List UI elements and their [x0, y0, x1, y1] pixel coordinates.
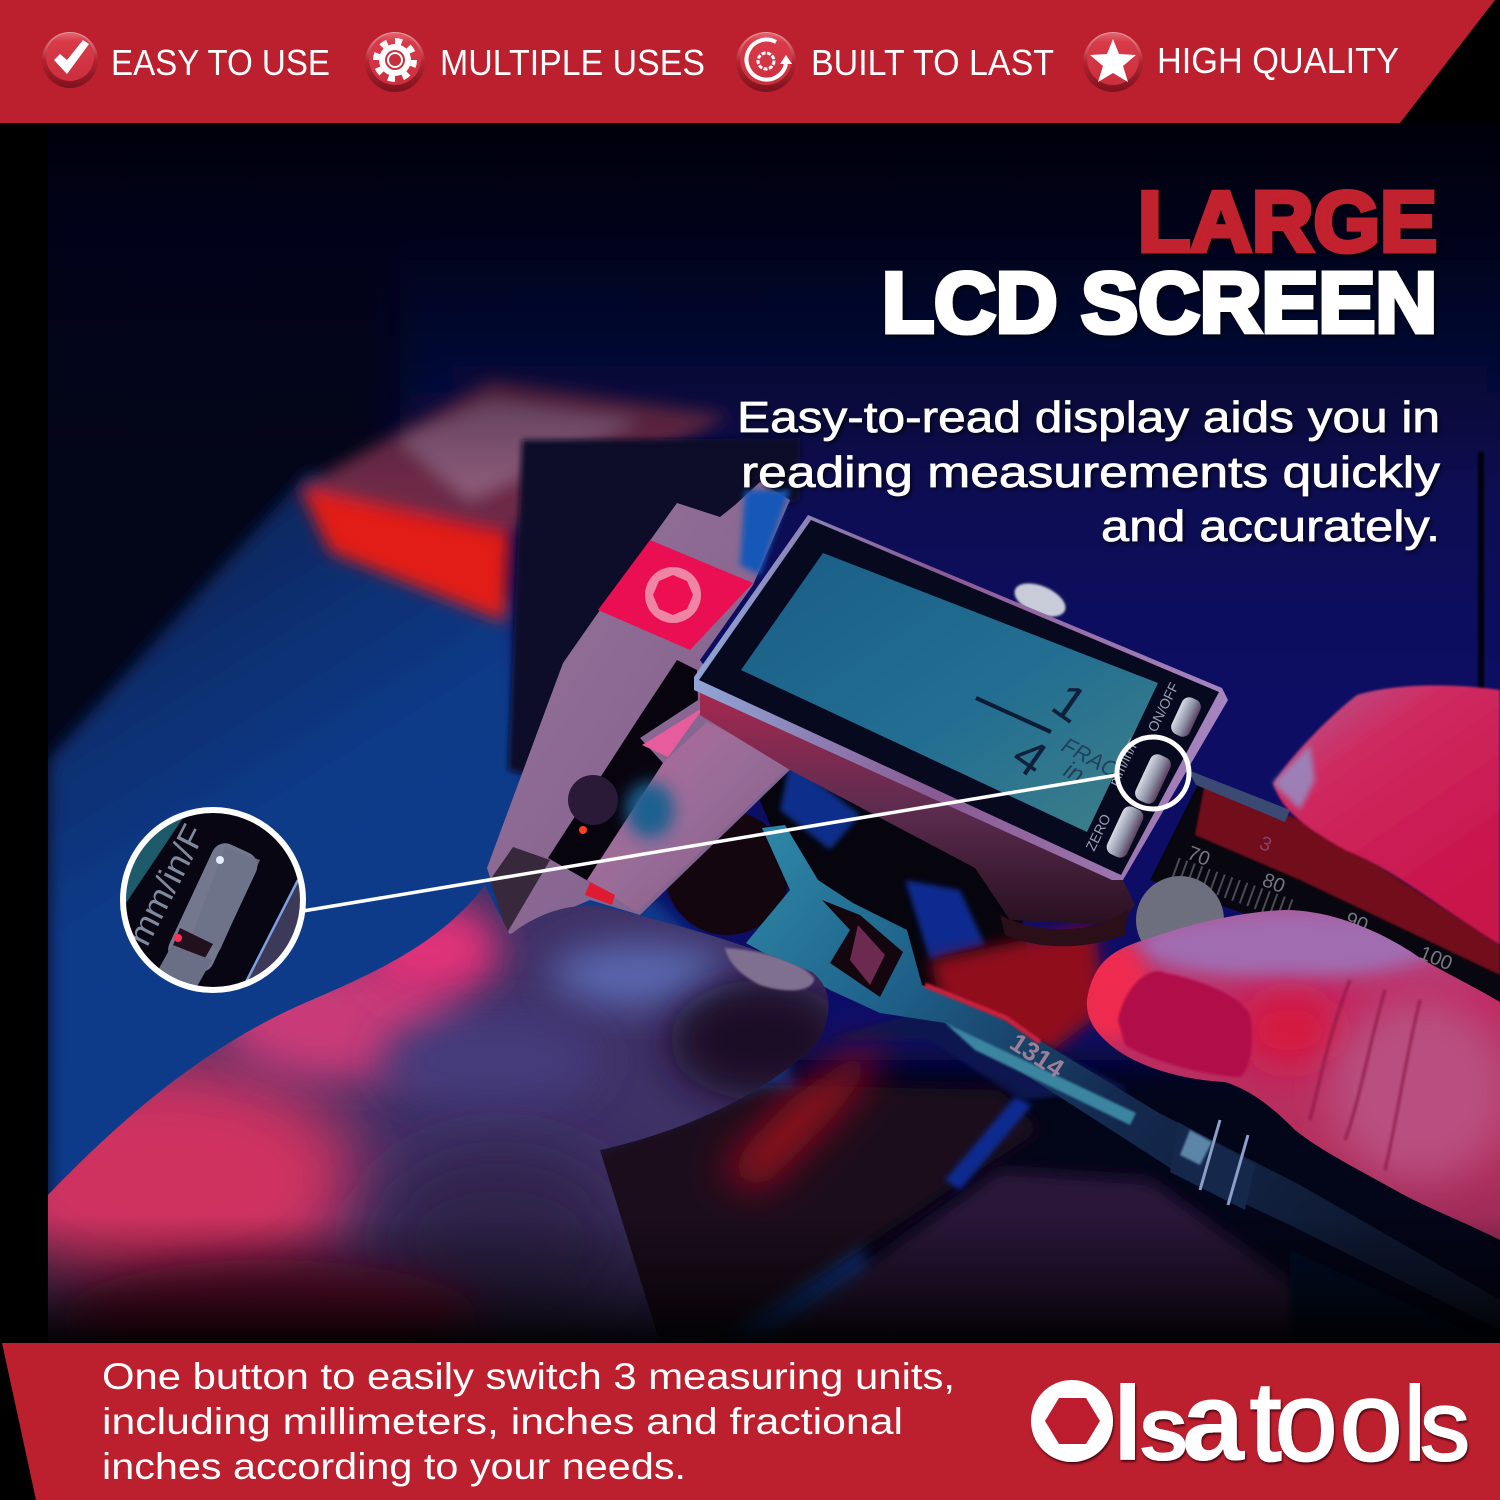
screen digits: 4 — [1002, 726, 1057, 788]
screen digits: FRAC — [1058, 732, 1122, 783]
button labels — [1086, 682, 1176, 852]
label: multiple uses: MULTIPLE USES — [440, 42, 705, 83]
brand logo: s — [1138, 1378, 1189, 1480]
badge: multiple uses — [365, 32, 425, 92]
top darkness overlay — [48, 123, 1500, 483]
screen digits — [975, 688, 1116, 780]
headline: large: LARGE — [1138, 175, 1437, 270]
ruler numbers — [1189, 836, 1452, 969]
top red banner — [0, 0, 1495, 123]
LCD screen — [741, 553, 1158, 832]
blurred red product box — [300, 380, 730, 622]
screen digits: in — [1059, 756, 1088, 789]
caliper ruler and scale — [1136, 770, 1500, 1005]
feature description: including millimeters, inches and fractional — [102, 1401, 903, 1442]
thumb wheel — [1136, 876, 1224, 941]
buttons — [1104, 695, 1204, 860]
right thumb — [1070, 900, 1500, 1240]
wrench size marking: 1314 — [1005, 1027, 1070, 1084]
label: easy to use: EASY TO USE — [111, 42, 330, 83]
dark fabric at lower right — [1290, 1250, 1500, 1345]
pale highlight on finger — [1273, 745, 1315, 810]
brand logo: too — [1250, 1359, 1402, 1484]
callout: magnified button: mm/in/F — [120, 819, 213, 952]
callout: leader line and button highlight — [303, 737, 1189, 911]
button labels: ZERO — [1082, 811, 1114, 853]
black tool case — [508, 438, 800, 780]
open-end wrench — [746, 825, 1500, 1330]
label: high quality: HIGH QUALITY — [1157, 40, 1399, 81]
blue fabric surface — [48, 470, 900, 1343]
description paragraph — [737, 393, 1440, 551]
caliper jaw — [487, 482, 795, 935]
LCD display housing — [694, 515, 1228, 946]
brand logo: Ol — [1031, 1365, 1142, 1483]
ruler numbers: 80 — [1259, 869, 1288, 898]
brand logo: l — [1403, 1365, 1427, 1483]
brand logo — [1031, 1359, 1470, 1484]
adjustment knob — [1000, 910, 1128, 946]
feature description — [102, 1356, 955, 1487]
bottom darkness overlay — [48, 1215, 1500, 1343]
wrench handle highlight — [945, 1023, 1136, 1125]
locking screw — [568, 775, 618, 825]
red band with logo ring — [598, 540, 753, 650]
feature description: inches according to your needs. — [102, 1446, 686, 1487]
description paragraph: and accurately. — [1101, 502, 1440, 551]
dark jaw tip — [490, 847, 550, 933]
label: built to last: BUILT TO LAST — [811, 42, 1054, 83]
callout: magnified button — [118, 808, 310, 994]
screen digits: 1 — [1042, 672, 1097, 734]
ruler numbers: 70 — [1184, 842, 1213, 871]
navy backdrop — [400, 260, 1500, 1060]
ruler numbers: 90 — [1342, 908, 1371, 937]
badge: built to last — [736, 32, 796, 92]
ruler numbers: 3 — [1256, 832, 1275, 857]
headline: lcd screen: LCD SCREEN — [882, 256, 1437, 351]
wrench jaw opening — [822, 900, 903, 997]
button labels: mm/in/F — [1105, 736, 1142, 788]
blue light on jaw top — [740, 490, 790, 575]
right index finger — [1273, 685, 1500, 945]
brand logo: s — [1420, 1370, 1470, 1482]
thumbnail — [1118, 971, 1252, 1077]
knuckle creases — [1310, 980, 1420, 1170]
feature description: One button to easily switch 3 measuring units, — [102, 1356, 955, 1397]
fingernail — [725, 948, 814, 990]
button labels: ON/OFF — [1144, 680, 1182, 734]
left hand — [48, 885, 828, 1340]
badge: easy to use — [42, 32, 98, 88]
mid-ground dark disc and red glow — [600, 770, 1290, 1336]
headline — [882, 175, 1437, 351]
slot openings — [548, 660, 698, 882]
badge: high quality — [1083, 32, 1143, 92]
brand logo: a — [1182, 1359, 1245, 1484]
bottom red banner — [2, 1343, 1500, 1500]
description paragraph: Easy-to-read display aids you in — [737, 393, 1440, 442]
wrench ratchet collar — [1170, 1122, 1255, 1210]
description paragraph: reading measurements quickly — [741, 448, 1440, 497]
ruler numbers: 100 — [1416, 942, 1455, 975]
